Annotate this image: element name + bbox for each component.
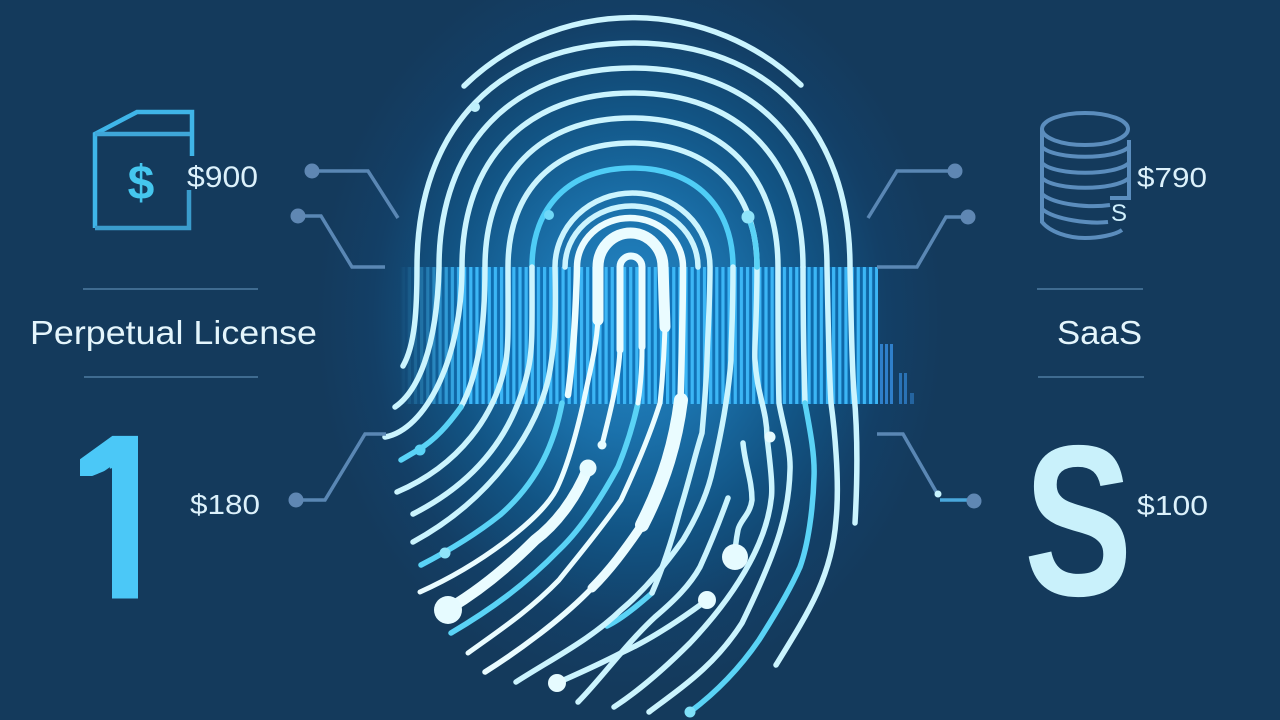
price: lower right: $100 [1137, 490, 1208, 521]
heading: Perpetual License: Perpetual License [30, 314, 317, 351]
minutiae nodes [414, 102, 776, 718]
middle ridges [413, 193, 752, 702]
connector: mid left [290, 208, 385, 267]
connector: upper right [868, 164, 962, 218]
inner core ridges [420, 218, 683, 672]
big letter S: S [1024, 401, 1132, 641]
top arc ridge [464, 18, 801, 86]
connector: mid right [877, 210, 976, 267]
icon: box with dollar sign: $ [128, 157, 155, 210]
divider: right bottom [1038, 376, 1144, 378]
fingerprint [385, 18, 857, 717]
barcode tail steps [880, 344, 914, 404]
connector: lower right [877, 434, 982, 508]
barcode scan band [400, 267, 878, 404]
icon: box with dollar sign [95, 112, 192, 228]
big numeral 1: 1 [62, 387, 179, 646]
thick ridge sections [450, 400, 681, 608]
connector: lower left [288, 434, 386, 508]
divider: left top [83, 288, 258, 290]
cyan ridge segments [401, 168, 814, 712]
connector: upper left [304, 164, 398, 218]
price: upper left: $900 [187, 161, 258, 194]
outer loop ridges [385, 43, 857, 712]
price: upper right: $790 [1137, 162, 1207, 193]
heading: SaaS: SaaS [1057, 314, 1142, 351]
divider: left bottom [84, 376, 258, 378]
icon: database cylinder: S [1111, 200, 1127, 227]
icon: database cylinder [1042, 113, 1129, 238]
price: lower left: $180 [190, 489, 260, 520]
divider: right top [1037, 288, 1143, 290]
